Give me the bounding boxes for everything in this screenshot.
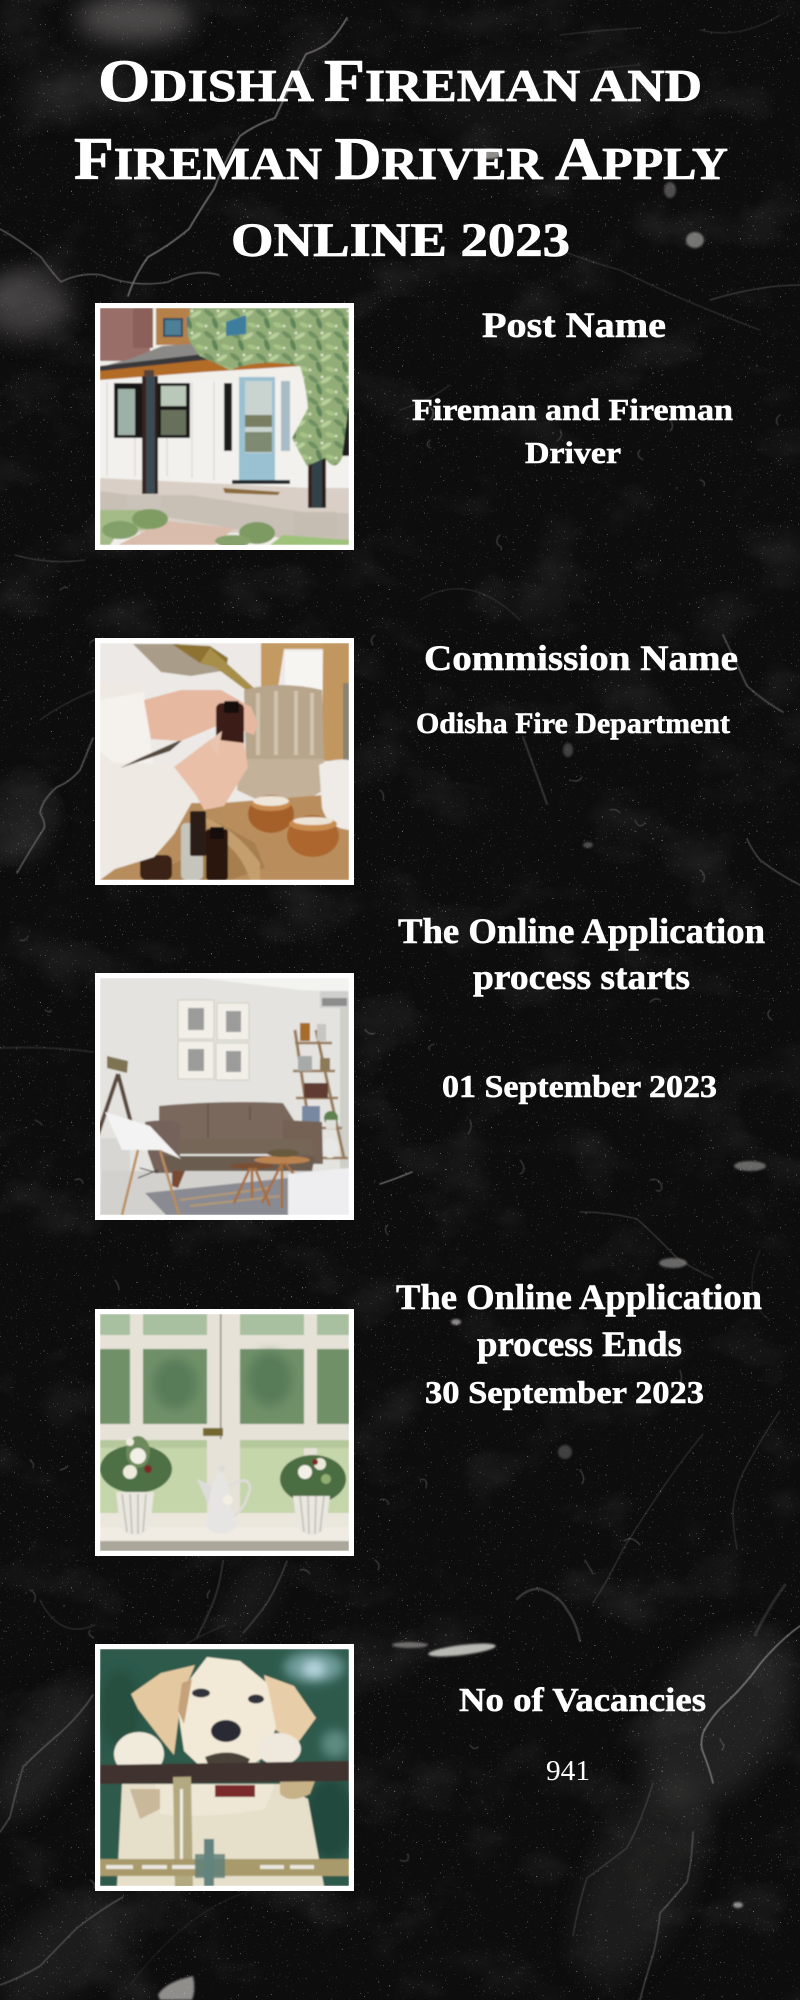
row 4 text: application ends [396,1277,762,1410]
heading: Commission Name [424,638,738,678]
row 4 photo: window with teapot and flowers [95,1309,354,1556]
heading: Post Name [482,305,666,345]
main veins drawn as strokes [128,18,347,296]
heading: The Online Application [398,911,765,951]
row 4 text: application ends: process Ends [477,1324,682,1364]
value: 01 September 2023 [442,1068,717,1104]
row 2 text: commission name [416,638,738,740]
value: 941 [546,1756,590,1787]
title line 1: ODISHA FIREMAN AND [98,48,702,114]
row 3 text: application starts: process starts [473,957,690,997]
row 3 photo: living room [95,973,354,1220]
value: Fireman and Fireman [412,392,733,427]
value: 30 September 2023 [425,1374,704,1410]
row 2 photo: hands with essential oil bottle [95,638,354,885]
title [74,48,728,267]
title line 2: FIREMAN DRIVER APPLY [74,126,728,192]
row 3 text: application starts [398,911,765,1104]
row 1 text: post name: Driver [525,435,621,470]
row 5 text: number of vacancies [459,1682,706,1787]
row 1 text: post name [412,305,733,470]
heading: No of Vacancies [459,1682,706,1719]
row 1 photo: house porch [95,303,354,550]
heading: The Online Application [396,1277,762,1317]
value: Odisha Fire Department [416,707,730,740]
title line 3: ONLINE 2023 [231,214,570,267]
row 5 photo: labrador puppy on fence [95,1644,355,1891]
short squiggles [20,406,780,1888]
